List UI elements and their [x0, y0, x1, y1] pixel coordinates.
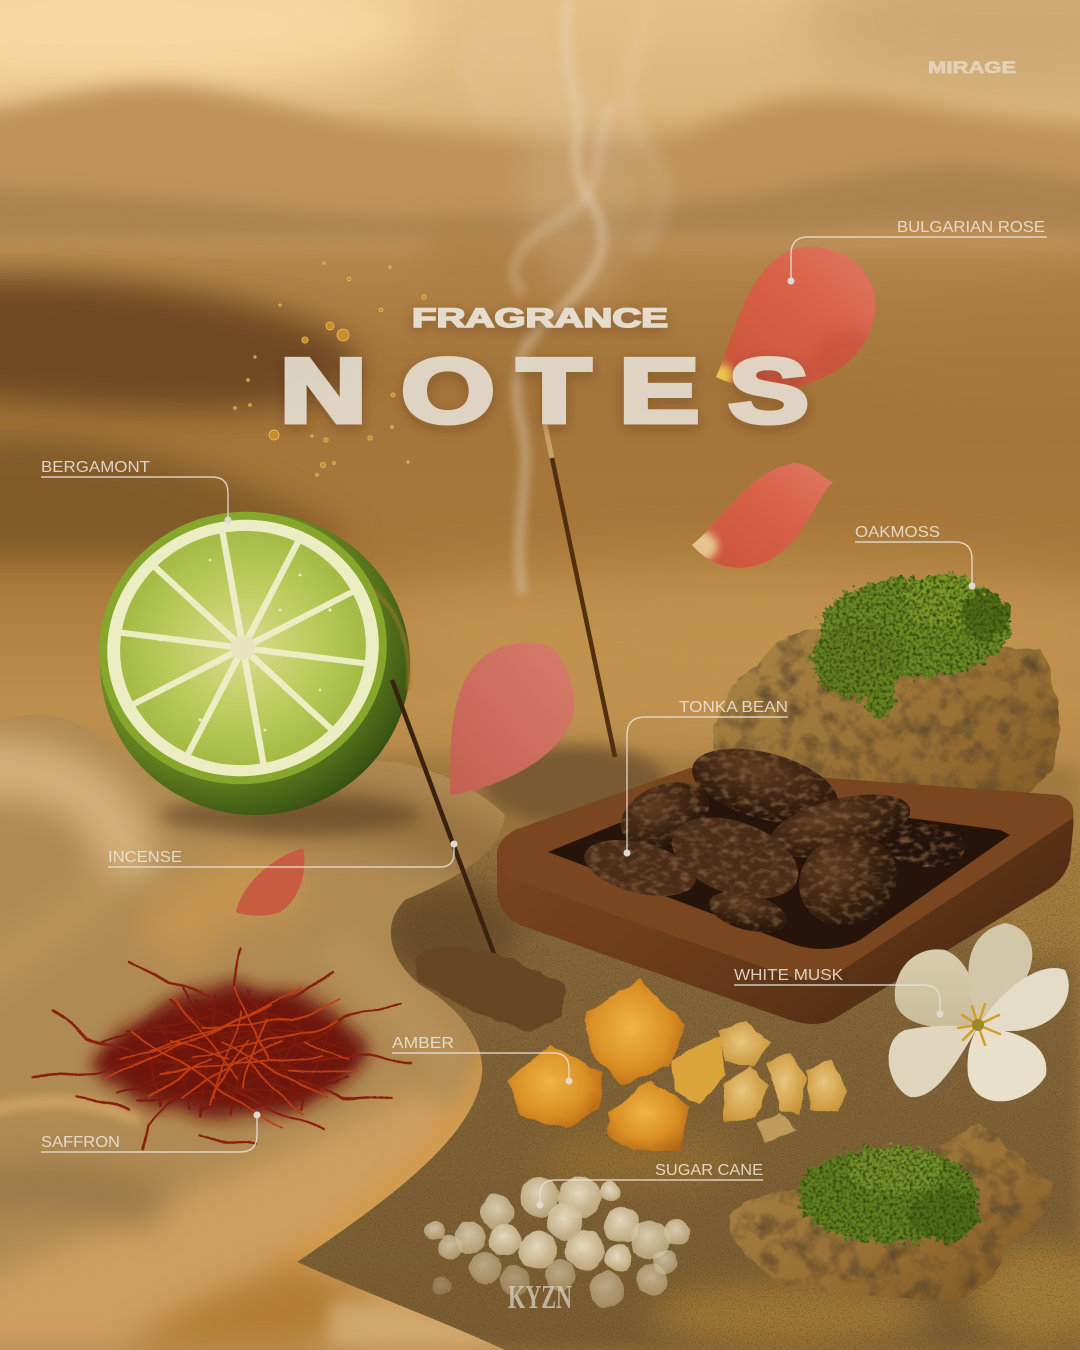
callout: amber [392, 1035, 572, 1084]
brand: mirage: MIRAGE [928, 58, 1016, 77]
wooden tray [497, 768, 1073, 1024]
callout: incense: INCENSE [108, 849, 182, 866]
incense holder block [415, 947, 565, 1032]
title: notes: NOTES [280, 340, 809, 442]
callout: incense [108, 840, 458, 867]
mossy rock [712, 574, 1059, 833]
callout: white musk [734, 967, 944, 1018]
callout: bergamont: BERGAMONT [41, 459, 150, 476]
callout: bergamont [41, 459, 232, 524]
callout: sugar cane: SUGAR CANE [655, 1162, 763, 1179]
title [280, 303, 809, 442]
stone base behind upper incense [483, 745, 667, 825]
rose petal: lower [450, 643, 574, 795]
logo: kyzn: KYZN [508, 1279, 572, 1316]
moss on lower rock [798, 1146, 980, 1243]
moss on rock [813, 574, 1010, 719]
lower incense stick [392, 680, 503, 978]
gold droplets [234, 262, 426, 476]
smoke from incense [468, 5, 662, 590]
callout: white musk: WHITE MUSK [734, 967, 843, 984]
callout: tonka bean [624, 699, 788, 856]
sandy ground [0, 753, 1080, 1350]
white flower [889, 923, 1069, 1101]
amber crystals [508, 980, 847, 1151]
callout: bulgarian rose [788, 219, 1047, 284]
rose petal: small on cloth [236, 848, 304, 916]
rose petal: middle [682, 463, 833, 568]
tonka beans [579, 735, 967, 941]
callout: amber: AMBER [392, 1035, 454, 1052]
draped cloth [0, 715, 505, 1350]
callout: tonka bean: TONKA BEAN [679, 699, 788, 716]
callout: oakmoss [855, 524, 976, 590]
callout: saffron [41, 1112, 260, 1152]
title: fragrance: FRAGRANCE [412, 303, 668, 333]
callout: oakmoss: OAKMOSS [855, 524, 940, 541]
sugar cane crystals [425, 1176, 690, 1308]
callout: saffron: SAFFRON [41, 1134, 120, 1151]
saffron threads [34, 948, 410, 1150]
lower mossy rock [730, 1122, 1050, 1301]
callout: sugar cane [536, 1162, 763, 1208]
rose petal: large [716, 247, 876, 387]
upper incense stick [545, 425, 615, 757]
lime half [78, 489, 420, 835]
callout: bulgarian rose: BULGARIAN ROSE [897, 219, 1045, 236]
